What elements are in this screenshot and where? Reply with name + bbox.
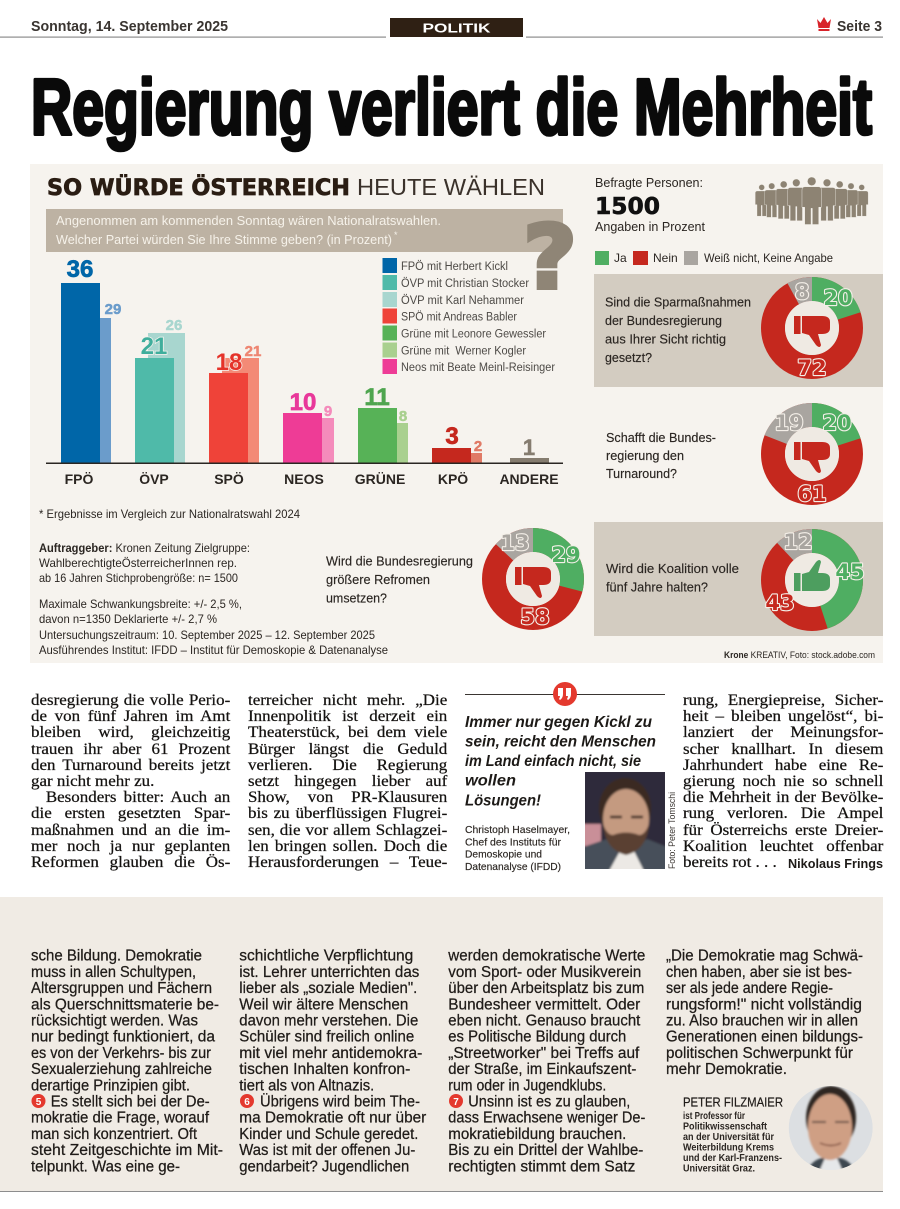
article column 1: trauen ihr aber 61 Prozent	[31, 741, 230, 758]
methodology text: Untersuchungszeitraum: 10. September 2025 – 12. September 2025	[39, 628, 375, 642]
author bio: Weiterbildung Krems	[683, 1142, 774, 1154]
donut chart: savings	[773, 280, 853, 380]
commentary column 2: gendarbeit? Jugendlichen	[239, 1158, 409, 1175]
commentary column 3: mokratiebildung brauchen.	[448, 1126, 626, 1143]
question band: Angenommen am kommenden Sonntag wären Nationalratswahlen.	[56, 213, 441, 228]
commentary column 1: derartige Prinzipien gibt.	[31, 1077, 190, 1094]
article column 1: desregierung die volle Perio-	[31, 692, 230, 709]
panel: savings question: Sind die Sparmaßnahmen	[605, 294, 751, 310]
chart legend: ÖVP mit Karl Nehammer	[401, 295, 524, 307]
article column 1: maßnahmen und an die im-	[31, 822, 230, 838]
article column 3: Koalition leuchtet offenbar	[683, 838, 883, 855]
commentary column 4: politischen Schwerpunkt für	[666, 1045, 853, 1062]
party labels: KPÖ	[438, 471, 468, 487]
article column 1	[30, 692, 230, 871]
commentary column 3: über den Arbeitsplatz bis zum	[448, 980, 644, 997]
article column 3: scher knallhart. In diesem	[683, 741, 883, 758]
commentary column 2: Schüler sind freilich online	[239, 1029, 414, 1046]
panel: savings question: der Bundesregierung	[605, 313, 722, 328]
commentary column 1: rücksichtigt werden. Was	[31, 1012, 198, 1030]
party labels: ANDERE	[499, 471, 559, 487]
date: Sonntag, 14. September 2025	[31, 18, 228, 35]
author bio: und der Karl-Franzens-	[683, 1153, 782, 1164]
commentary column 1: Sexualerziehung zahlreiche	[31, 1061, 212, 1078]
footnote: * Ergebnisse im Vergleich zur Nationalratswahl 2024	[39, 507, 300, 521]
poll heading: HEUTE WÄHLEN	[357, 174, 545, 200]
bar values	[67, 256, 535, 460]
commentary column 3: der Straße, im Einkaufszent-	[448, 1061, 636, 1078]
article column 3: rung verloren. Die Ampel	[683, 805, 883, 822]
commentary column 4: „Die Demokratie mag Schwä-	[666, 948, 863, 965]
methodology text: WahlberechtigteÖsterreicherInnen rep.	[39, 556, 237, 570]
chart legend: ÖVP mit Christian Stocker	[401, 278, 529, 290]
article column 3: gierung noch nie so schnell	[683, 773, 883, 790]
icon: question mark: ?	[523, 206, 577, 309]
commentary column 3: rechtigten stimmt dem Satz	[448, 1158, 635, 1175]
article column 2: len bringen sollen. Doch die	[248, 838, 447, 855]
article column 3: für Österreichs erste Dreier-	[683, 822, 883, 838]
panel: coalition question: fünf Jahre halten?	[606, 580, 708, 594]
donut chart: coalition: 43	[765, 591, 795, 615]
donut chart: reforms: 58	[520, 605, 550, 629]
article column 2: Theaterstück, bei dem viele	[248, 724, 447, 741]
commentary column 4: rungsform!" nicht vollständig	[666, 996, 862, 1013]
pull quote: Lösungen!	[465, 792, 541, 810]
commentary column 3: es Politische Bildung durch	[448, 1029, 626, 1046]
panel: coalition question	[594, 522, 883, 636]
party labels: GRÜNE	[355, 471, 405, 487]
poll heading: SO WÜRDE ÖSTERREICH	[47, 175, 350, 201]
chart legend	[382, 258, 555, 374]
article column 1: mer noch ja nur geplanten	[31, 838, 230, 855]
commentary column 4: Generationen einen bildungs-	[666, 1029, 863, 1046]
commentary column 3	[447, 948, 645, 1175]
methodology text: Auftraggeber: Kronen Zeitung Zielgruppe:	[39, 541, 250, 555]
article column 1: gar nicht mehr zu.	[31, 773, 154, 790]
pull quote: wollen	[465, 772, 516, 790]
pull quote: im Land einfach nicht, sie	[465, 753, 641, 770]
party labels: SPÖ	[214, 471, 244, 487]
article column 1: die ersten gesetzten Spar-	[31, 805, 230, 822]
portrait photo: Peter Filzmaier	[789, 1086, 873, 1172]
icon: crowd of people	[755, 177, 868, 225]
author bio: Politikwissenschaft	[683, 1122, 768, 1132]
pull quote: sein, reicht den Menschen	[465, 734, 656, 750]
donut chart: coalition: 12	[783, 530, 813, 554]
bar values: 10	[290, 389, 316, 416]
methodology text: ab 16 Jahren Stichprobengröße: n= 1500	[39, 571, 238, 585]
page number: Seite 3	[837, 19, 882, 35]
commentary column 1: muss in allen Schultypen,	[31, 964, 196, 981]
commentary column 1: mokratie die Frage, worauf	[31, 1110, 210, 1127]
commentary column 2: lieber als „soziale Medien".	[239, 980, 417, 997]
question: reforms: umsetzen?	[326, 590, 387, 606]
icon: number 7: 7	[453, 1097, 459, 1108]
commentary column 2: Was ist mit der offenen Ju-	[239, 1142, 415, 1159]
methodology text	[39, 541, 388, 657]
panel: turnaround question	[606, 411, 852, 506]
chart legend: FPÖ mit Herbert Kickl	[401, 261, 508, 273]
respondents block: Befragte Personen:	[595, 176, 703, 190]
author bio: PETER FILZMAIER	[683, 1096, 783, 1110]
article column 1: den Turnaround bereits jetzt	[31, 757, 230, 774]
panel: savings question	[594, 274, 883, 387]
donut chart: savings: 8	[795, 280, 809, 304]
quote attribution: Demoskopie und	[465, 848, 542, 860]
bar chart: party results	[46, 256, 563, 487]
question: reforms: größere Refromen	[326, 572, 430, 587]
commentary column 2: ist. Lehrer unterrichten das	[239, 964, 420, 981]
article column 2: terreicher nicht mehr. „Die	[248, 692, 447, 709]
article column 1: Reformen glauben die Ös-	[31, 854, 230, 871]
article column 3: bereits rot . . .	[683, 854, 777, 871]
donut legend: Weiß nicht, Keine Angabe	[704, 251, 833, 265]
bar values: 21	[141, 333, 167, 360]
party labels: FPÖ	[65, 471, 93, 487]
bar values: 11	[364, 384, 390, 411]
panel: turnaround question: regierung den	[606, 448, 684, 463]
author bio: Universität Graz.	[683, 1164, 755, 1174]
article column 2	[248, 692, 448, 871]
icon: number 5	[32, 1094, 46, 1108]
header bar	[0, 17, 883, 38]
author bio: an der Universität für	[683, 1132, 774, 1143]
donut chart: coalition	[765, 530, 865, 619]
commentary column 4: ser als jede andere Regie-	[666, 980, 833, 997]
donut chart: turnaround: 19	[774, 411, 804, 435]
commentary column 1	[31, 948, 223, 1175]
author bio: ist Professor für	[683, 1111, 745, 1122]
bar values: 9	[324, 403, 332, 420]
commentary column 1: Altersgruppen und Fächern	[31, 980, 212, 997]
donut chart: coalition: 45	[835, 560, 865, 584]
panel: coalition question: Wird die Koalition volle	[606, 561, 739, 576]
icon: number 6	[240, 1094, 254, 1108]
commentary column 3: dass Erwachsene weniger De-	[448, 1110, 645, 1127]
pull quote: Immer nur gegen Kickl zu	[465, 714, 653, 731]
bar values: 21	[245, 343, 261, 360]
donut legend	[595, 251, 833, 265]
commentary column 2: ma Demokratie oft nur über	[239, 1110, 426, 1127]
commentary column 2: mit viel mehr antidemokra-	[239, 1045, 422, 1062]
donut chart: reforms: 29	[551, 543, 581, 567]
section label: POLITIK	[422, 20, 491, 36]
article column 2: bis zu überflüssigen Flugrei-	[248, 805, 447, 822]
quote attribution	[465, 824, 570, 873]
respondents block	[595, 176, 706, 234]
question: reforms	[326, 554, 473, 606]
question band: *	[394, 230, 398, 240]
bar values: 18	[216, 349, 242, 376]
commentary column 3: rum oder in Jugendklubs.	[448, 1077, 606, 1094]
article column 3	[682, 692, 884, 871]
commentary column 3: „Streetworker" bei Treffs auf	[448, 1045, 640, 1062]
commentary column 2: schichtliche Verpflichtung	[239, 948, 413, 965]
bar values: 36	[67, 256, 93, 283]
article column 3: heit – bleiben ungelöst“, bi-	[683, 708, 883, 725]
commentary column 4	[666, 948, 863, 1078]
commentary column 2: tischen Inhalten konfron-	[239, 1061, 410, 1078]
article column 2: Innenpolitik ist derzeit ein	[248, 708, 447, 725]
section label	[390, 18, 523, 37]
commentary column 2	[239, 948, 426, 1175]
commentary column 3: werden demokratische Werte	[447, 948, 645, 965]
pull quote	[465, 682, 665, 873]
party labels: ÖVP	[139, 471, 169, 487]
article column 1: Besonders bitter: Auch an	[46, 789, 230, 806]
bar values: 2	[474, 438, 482, 455]
question: reforms: Wird die Bundesregierung	[326, 554, 473, 568]
article column 2: setzt hingegen lieber auf	[248, 773, 447, 790]
panel: savings question: aus Ihrer Sicht richtig	[605, 332, 726, 346]
question band: Welcher Partei würden Sie Ihre Stimme geben? (in Prozent)	[56, 232, 392, 247]
commentary column 1: man sich konzentriert. Oft	[31, 1126, 198, 1143]
commentary column 1: nur bedingt funktioniert, da	[31, 1029, 215, 1046]
commentary column 2: Weil wir ältere Menschen	[239, 996, 408, 1013]
commentary column 1: steht Zeitgeschichte im Mit-	[31, 1142, 223, 1159]
bar values: 26	[166, 317, 182, 334]
commentary column 1: telpunkt. Was eine ge-	[31, 1158, 180, 1175]
respondents block: Angaben in Prozent	[595, 220, 706, 234]
donut chart: reforms	[494, 531, 581, 629]
methodology text: davon n=1350 Deklarierte +/- 2,7 %	[39, 612, 217, 626]
article column 2: verlieren. Die Regierung	[248, 757, 447, 774]
icon: quotation mark	[553, 682, 577, 706]
chart legend: Grüne mit Leonore Gewessler	[401, 328, 546, 340]
commentary column 3: Bundesheer vermittelt. Oder	[448, 996, 640, 1013]
party labels	[65, 471, 559, 487]
quote attribution: Christoph Haselmayer,	[465, 824, 570, 836]
panel: poll infographic	[30, 164, 883, 663]
commentary column 1: Es stellt sich bei der De-	[51, 1094, 210, 1110]
article column 3: lanziert der Meinungsfor-	[683, 724, 883, 741]
quote attribution: Datenanalyse (IFDD)	[465, 861, 561, 873]
commentary column 3: vom Sport- oder Musikverein	[448, 964, 641, 981]
article column 1: de von fünf Jahren im Amt	[31, 708, 230, 725]
commentary column 1: als Querschnittsmaterie be-	[31, 996, 219, 1013]
author bio	[683, 1096, 783, 1174]
portrait photo: Christoph Haselmayer	[583, 770, 667, 871]
commentary column 1: es von der Verkehrs- bis zur	[31, 1045, 211, 1062]
panel: turnaround question: Turnaround?	[606, 466, 677, 481]
icon: number 5: 5	[36, 1097, 42, 1108]
donut chart: savings: 20	[823, 286, 853, 310]
chart legend: Grüne mit Werner Kogler	[401, 346, 526, 358]
article column 3: die Mehrheit in der Bevölke-	[683, 789, 883, 806]
article column 1: bleiben wird, gleichzeitig	[31, 724, 230, 741]
commentary column 2: davon mehr verstehen. Die	[239, 1012, 418, 1030]
methodology text: Ausführendes Institut: IFDD – Institut für Demoskopie & Datenanalyse	[39, 643, 388, 657]
panel: turnaround question: Schafft die Bundes-	[606, 430, 716, 445]
donut chart: savings: 72	[797, 356, 827, 380]
commentary column 3: eben nicht. Genauso braucht	[448, 1012, 641, 1030]
panel: commentary background	[0, 897, 883, 1192]
photo credit: Foto: Peter Tomschi	[667, 792, 677, 869]
bar values: 8	[399, 408, 407, 425]
donut chart: reforms: 13	[500, 531, 530, 555]
article column 3: Jahrhundert habe eine Re-	[683, 757, 883, 774]
quote attribution: Chef des Instituts für	[465, 836, 561, 848]
party labels: NEOS	[284, 471, 324, 487]
bar values: 3	[445, 423, 459, 450]
commentary column 4: mehr Demokratie.	[666, 1061, 787, 1078]
commentary column 4: zu. Also brauchen wir in allen	[666, 1012, 858, 1030]
bar values: 29	[105, 301, 121, 318]
author signature: Nikolaus Frings	[788, 857, 883, 871]
donut chart: turnaround: 61	[797, 482, 827, 506]
article column 2: Bürger längst die Geduld	[248, 741, 447, 758]
respondents block: 1500	[595, 194, 660, 220]
article column 2: Herausforderungen – Teue-	[248, 854, 447, 871]
methodology text: Maximale Schwankungsbreite: +/- 2,5 %,	[39, 597, 242, 611]
donut chart: turnaround	[773, 411, 852, 506]
chart legend: Neos mit Beate Meinl-Reisinger	[401, 362, 555, 374]
commentary column 3: Bis zu ein Drittel der Wahlbe-	[448, 1142, 643, 1159]
article column 3: rung, Energiepreise, Sicher-	[683, 692, 883, 709]
commentary column 2: tiert als von Altnazis.	[239, 1077, 374, 1094]
commentary column 4: chen haben, aber sie ist bes-	[666, 964, 852, 981]
panel: savings question: gesetzt?	[605, 350, 652, 365]
icon: crown	[817, 17, 831, 31]
commentary column 3: Unsinn ist es zu glauben,	[468, 1094, 630, 1110]
commentary column 2: Kinder und Schule geredet.	[239, 1126, 418, 1143]
chart legend: SPÖ mit Andreas Babler	[401, 312, 517, 324]
donut legend: Nein	[653, 251, 678, 265]
donut legend: Ja	[614, 251, 627, 265]
article column 2: sen, die vor allem Schlagzei-	[248, 822, 447, 838]
question band	[46, 209, 563, 252]
commentary column 1: sche Bildung. Demokratie	[31, 948, 202, 965]
donut chart: turnaround: 20	[822, 411, 852, 435]
icon: number 7	[449, 1094, 463, 1108]
commentary column 2: Übrigens wird beim The-	[260, 1092, 420, 1110]
icon: number 6: 6	[244, 1097, 250, 1108]
bar values: 1	[523, 435, 535, 460]
poll heading	[47, 174, 545, 201]
image credit: Krone KREATIV, Foto: stock.adobe.com	[724, 650, 875, 660]
article column 2: Show, von PR-Klausuren	[248, 789, 447, 806]
